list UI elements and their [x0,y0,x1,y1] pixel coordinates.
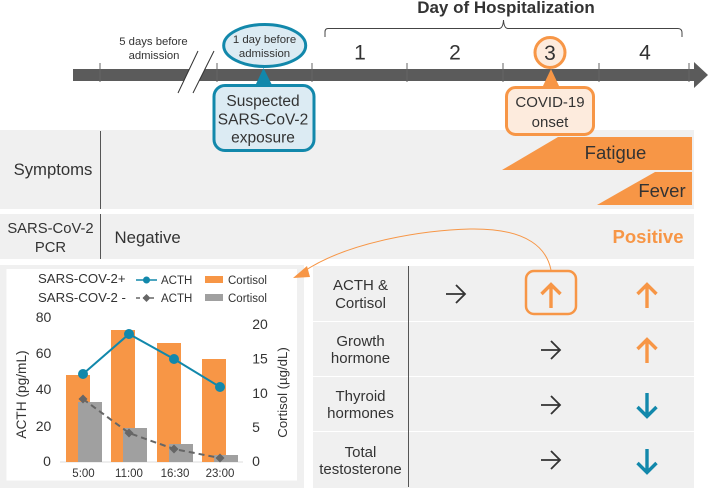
callout: suspected exposure [214,68,314,150]
up arrows: elevated [542,284,656,363]
symptom bar: fatigue: Fatigue [585,142,646,163]
chart legend: Cortisol [228,293,267,305]
panel: hormones table [313,266,694,488]
left axis: 60 [36,345,51,361]
chart legend: SARS-COV-2 - [38,290,126,305]
left axis: 20 [36,418,51,434]
right arrows: unchanged [446,285,560,469]
row labels [319,277,402,478]
right axis: 15 [252,350,268,366]
timeline arrow [73,51,708,93]
row labels: hormones [327,405,394,422]
heading: day of hospitalization [325,0,682,37]
chart legend: SARS-COV-2+ [38,271,126,286]
row labels: hormone [331,350,390,367]
day numbers: 4 [639,42,651,64]
callout: covid-19 onset [506,69,594,134]
down arrows: decreased [638,393,656,472]
left axis: 40 [36,381,51,397]
negative acth line [78,394,224,462]
callout: 1 day before admission: admission [239,48,290,60]
panel: pcr: Positive [613,226,684,247]
chart legend [38,271,267,305]
callout: covid-19 onset: COVID-19 [515,94,585,111]
x axis labels: 23:00 [206,468,234,480]
row labels: Growth [336,333,385,350]
left axis: 80 [36,309,51,325]
row labels: Thyroid [335,388,386,405]
row labels: ACTH & [333,277,388,294]
right axis: Cortisol (µg/dL) [275,347,290,438]
chart panel [6,269,297,480]
left axis: ACTH (pg/mL) [14,350,29,439]
x axis labels: 16:30 [161,468,189,480]
symptom bar: fever: Fever [638,180,686,201]
symptom bar: fatigue [502,137,692,170]
orange cortisol bars [66,330,226,462]
row labels: testosterone [319,461,402,478]
chart legend: Cortisol [228,275,267,287]
panel: pcr [0,214,694,259]
x axis labels: 5:00 [72,468,95,480]
panel: symptoms: Symptoms [14,160,92,179]
callout: 1 day before admission [224,24,306,66]
label: 5 days before admission: 5 days before [119,36,188,48]
right axis [252,316,290,469]
label: 5 days before admission: admission [129,50,179,62]
left axis [14,309,51,469]
right axis: 0 [252,453,260,469]
gray cortisol bars [78,402,238,462]
right axis: 10 [252,385,268,401]
panel: pcr: Negative [114,228,181,247]
x axis labels [72,468,234,480]
chart legend: ACTH [161,293,192,305]
panel: pcr: SARS-CoV-2 [7,221,94,237]
row labels: Total [345,444,376,461]
highlight box [526,271,576,314]
right axis: 20 [252,316,268,332]
callout: covid-19 onset: onset [532,114,569,131]
chart legend: ACTH [161,275,192,287]
callout: suspected exposure: Suspected [226,93,300,110]
panel: symptoms [0,130,694,209]
positive acth line [78,329,225,392]
panel: pcr: PCR [35,240,66,256]
day numbers [354,42,651,64]
callout: suspected exposure: SARS-CoV-2 [218,112,308,128]
day 3 marker: 3 [544,42,556,65]
connector arrow [293,229,551,278]
callout: 1 day before admission: 1 day before [233,34,296,46]
panel: chart background [0,265,304,488]
x axis labels: 11:00 [115,468,143,480]
row labels: Cortisol [335,295,386,312]
day numbers: 1 [354,42,366,64]
symptom bar: fever [597,172,692,205]
day numbers: 2 [449,42,461,64]
callout: suspected exposure: exposure [231,130,295,146]
left axis: 0 [43,453,51,469]
right axis: 5 [252,419,260,435]
day 3 marker [535,38,565,68]
